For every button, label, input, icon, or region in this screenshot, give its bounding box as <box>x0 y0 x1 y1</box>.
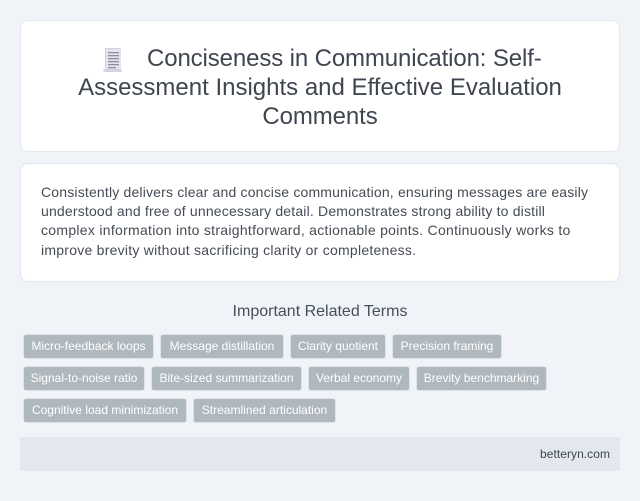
tag: brevity benchmarking: Brevity benchmarking <box>424 371 539 385</box>
paragraph line 1: Consistently delivers clear and concise communication, ensuring messages are easily <box>41 184 588 200</box>
tag: clarity quotient <box>290 334 386 359</box>
tag: signal-to-noise ratio <box>23 366 145 391</box>
tag: bite-sized summarization <box>151 366 302 391</box>
title line 2: Assessment Insights and Effective Evaluation <box>78 74 562 101</box>
tag: micro-feedback loops <box>23 334 154 359</box>
panel: description card <box>20 163 620 282</box>
tag: signal-to-noise ratio: Signal-to-noise ratio <box>31 371 137 385</box>
panel: title card <box>20 20 620 152</box>
footer: site name: betteryn.com <box>540 447 610 461</box>
tag: message distillation: Message distillation <box>170 339 274 353</box>
tag: cognitive load minimization <box>23 398 187 423</box>
tag: streamlined articulation: Streamlined articulation <box>202 403 327 417</box>
footer bar <box>20 437 620 471</box>
tag: verbal economy <box>308 366 410 391</box>
paragraph line 3: complex information into straightforward, actionable points. Continuously works to <box>41 222 571 238</box>
tag: cognitive load minimization: Cognitive load minimization <box>32 403 178 417</box>
paragraph line 4: improve brevity without sacrificing clarity or completeness. <box>41 242 416 258</box>
heading: related terms: Important Related Terms <box>233 303 407 320</box>
tag: streamlined articulation <box>193 398 336 423</box>
icon: document scroll <box>103 48 122 72</box>
tag: brevity benchmarking <box>416 366 547 391</box>
title line 1: Conciseness in Communication: Self- <box>147 45 542 72</box>
tag: precision framing <box>392 334 502 359</box>
tag: message distillation <box>160 334 284 359</box>
tag: bite-sized summarization: Bite-sized summarization <box>159 371 294 385</box>
tag: verbal economy: Verbal economy <box>316 371 402 385</box>
paragraph line 2: understood and free of unnecessary detail. Demonstrates strong ability to distill <box>41 203 545 219</box>
tag: clarity quotient: Clarity quotient <box>298 339 378 353</box>
tag: precision framing: Precision framing <box>401 339 493 353</box>
tag: micro-feedback loops: Micro-feedback loops <box>31 339 146 353</box>
title line 3: Comments <box>262 103 378 130</box>
